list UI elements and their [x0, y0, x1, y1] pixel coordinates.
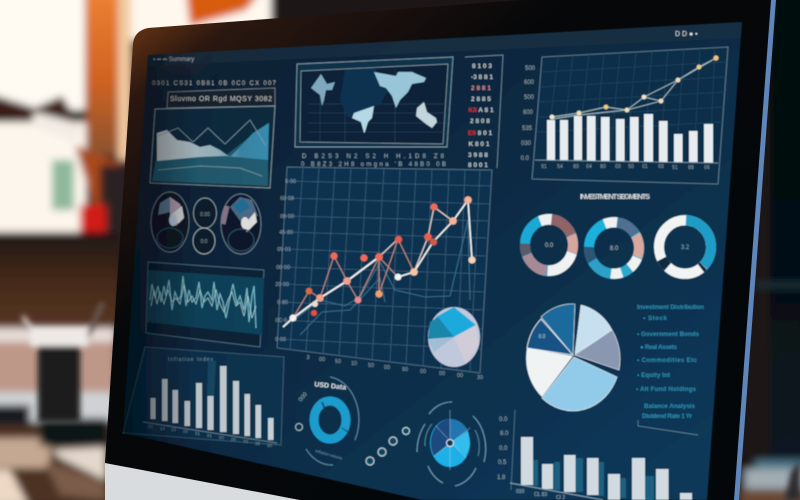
side markers: 000: [298, 391, 309, 403]
x labels: 38: [255, 441, 261, 446]
y axis labels: 20 00: [275, 282, 289, 288]
y labels column beside right gauge: 1.8: [497, 475, 506, 481]
bars: [547, 114, 713, 163]
grid: [537, 47, 727, 160]
big pie chart: [526, 304, 620, 411]
y axis labels: 0C 0: [275, 318, 287, 324]
gauge three: [221, 194, 261, 254]
salmon series: [293, 239, 414, 318]
panel: legend list: Dividend Rate 1 Yr: [642, 413, 693, 420]
area chart title: Sluvmo OR Rgd MQSY 3082: [170, 96, 272, 103]
y labels: 600: [523, 110, 534, 116]
panel: waveform: [146, 262, 264, 347]
land: dark continent: [340, 68, 388, 118]
panel: area chart: [150, 88, 275, 188]
x axis labels: [306, 355, 483, 381]
panel: legend list: Investment Distribution: [637, 304, 704, 311]
chart heading: Inflation Index: [168, 357, 214, 363]
y axis labels: 00 00: [276, 265, 290, 271]
x axis labels: 00: [457, 373, 463, 379]
x labels: 91: [195, 431, 201, 436]
x labels: 60: [219, 435, 225, 440]
x axis labels: 00: [384, 365, 390, 371]
panel: legend list: ▪ Equity Int: [637, 372, 670, 379]
panel: main line chart: [275, 167, 492, 381]
table values: 3 9 8 8: [468, 152, 488, 159]
donut three label: 3.2: [681, 244, 690, 251]
y axis labels: 05 01: [277, 247, 291, 253]
y axis labels: 00 00: [280, 214, 294, 220]
map caption: D B2S3 N2 S2 H H,1D8 Z8: [302, 154, 445, 160]
gauge two small circles: 0:30: [200, 212, 210, 218]
panel: legend list: ▪ Commodities Etc: [637, 357, 698, 364]
y axis labels: 60 08: [280, 196, 294, 202]
panel: top-right bar and line chart: [521, 47, 728, 184]
x labels: 01: [642, 164, 648, 170]
y axis labels: 45 80: [279, 230, 293, 236]
x labels: 91: [541, 164, 547, 170]
gauge two small circles: 0:0: [201, 239, 208, 245]
x axis labels: 30: [477, 375, 483, 381]
baseline: [143, 422, 277, 443]
pie slice: light blue: [542, 357, 617, 411]
screen: [123, 22, 742, 500]
waveform series: [150, 276, 256, 328]
faint teal series: [291, 220, 470, 335]
x labels: 030: [516, 489, 525, 495]
x axis labels: 00: [319, 357, 325, 363]
hub: [446, 440, 454, 446]
bars: [150, 366, 274, 440]
land: eurasia: [374, 72, 426, 108]
y labels: 600: [524, 80, 535, 86]
land: north america: [311, 74, 335, 106]
y labels column beside right gauge: 0.0: [499, 446, 508, 452]
caption: Inflation volume: [315, 448, 344, 461]
y axis labels: 0 00: [275, 337, 286, 343]
donut two: [579, 212, 649, 284]
white bars: [521, 437, 692, 500]
panel: world map: 0 B8Z3 2H8 omgna 'B 48B0 0B: [301, 162, 446, 168]
x labels: 04: [586, 164, 592, 170]
outer arc: [306, 377, 359, 465]
panel: world map: [295, 57, 453, 168]
pen on desk: [785, 462, 800, 500]
y labels column beside right gauge: 8.0: [500, 431, 509, 437]
y labels column beside right gauge: [497, 417, 509, 481]
table values: K 8 0 1: [469, 141, 490, 148]
table values: 8 1 0 3: [472, 63, 492, 70]
outer arcs: [417, 402, 486, 486]
x labels: 23: [171, 427, 177, 432]
gauge heading: USD Data: [314, 381, 346, 392]
y labels: [521, 66, 536, 162]
gauge: left ring donut: [296, 377, 359, 465]
x labels: 50: [628, 164, 634, 170]
x labels: 00: [615, 164, 621, 170]
left-side screen shading: [123, 22, 742, 500]
y axis labels: 6 00: [285, 179, 296, 185]
x axis labels: 50: [335, 359, 341, 365]
y labels: 500: [524, 95, 535, 101]
panel: bottom-right bar chart: [510, 410, 692, 500]
x labels: 00: [231, 437, 237, 442]
window controls: D D ● ▪: [675, 31, 698, 38]
pie slice: dark blue: [527, 319, 573, 355]
land: australia: [416, 102, 437, 128]
gauge two small circles: [193, 198, 216, 254]
screen top bar: [148, 22, 742, 66]
pie slice: white: [526, 348, 573, 397]
y axis labels: 0 80: [277, 300, 288, 306]
grid lines: [278, 168, 491, 372]
panel: legend list: ▪ Government Bonds: [637, 331, 700, 338]
teal lower band: [152, 123, 268, 186]
panel: legend list: ● Real Assets: [640, 344, 678, 351]
gauge: right radial pie: [417, 402, 486, 486]
x labels: 81: [207, 433, 213, 438]
pie label: 0.0: [539, 334, 546, 340]
x axis labels: 00: [439, 371, 445, 377]
x labels: 88: [688, 165, 694, 171]
pie slice: mid blue: [541, 304, 575, 355]
x labels: 70: [243, 439, 249, 444]
small status icons: [366, 428, 410, 465]
legend entry: ▪ Stock: [643, 315, 668, 322]
x labels: 00: [183, 429, 189, 434]
silver monitor edge: [734, 0, 776, 500]
table values: 8 0 0 1: [468, 162, 488, 169]
panel: bottom-left bar chart: [123, 347, 284, 448]
table values: [468, 63, 494, 169]
y labels column beside right gauge: 0.5: [498, 460, 507, 466]
panel: legend list: [636, 304, 704, 435]
panel: legend list: ▪ Alt Fund Holdings: [636, 386, 697, 393]
teal shadow bars: [532, 458, 654, 500]
x labels: 00: [148, 424, 154, 429]
x labels: [541, 164, 710, 171]
highlight band: [207, 360, 216, 396]
gauge one: [151, 192, 189, 252]
section heading: INVESTMENT SEGMENTS: [580, 192, 650, 201]
table values: E9 8 0 1: [468, 130, 492, 137]
donut one: [518, 212, 580, 278]
white series: [283, 257, 379, 327]
y labels: 535: [522, 126, 533, 132]
panel: number table: [465, 55, 503, 169]
ring: [314, 401, 346, 439]
y labels column beside right gauge: 0.0: [499, 417, 508, 423]
grey to blue area series: [157, 123, 269, 161]
table values: -3 8 8 1: [471, 74, 493, 81]
x axis labels: 10: [351, 361, 357, 367]
baseline: [535, 160, 718, 163]
x labels: 51: [672, 165, 678, 171]
x labels: 30: [267, 443, 273, 448]
x labels: 80: [600, 164, 606, 170]
pie: [430, 419, 470, 467]
x axis labels: 50: [368, 363, 374, 369]
x labels: 80: [573, 164, 579, 170]
x labels: CL 83: [534, 492, 547, 498]
table values: 2 8 8 5: [471, 96, 491, 103]
x labels: 06: [704, 165, 710, 171]
baseline: [510, 483, 603, 500]
x labels: 54: [557, 164, 563, 170]
y labels: 030: [521, 141, 532, 147]
donut two label: 8.0: [610, 245, 619, 252]
panel: legend list: Balance Analysis: [644, 403, 696, 410]
pie slice: grey: [575, 330, 620, 370]
pen cup with pens: [24, 304, 102, 422]
tab labels row: 0301 CS31 0B81 0B 0C0 CX 007: [152, 81, 277, 87]
monitor stand chin: [105, 462, 300, 500]
pie slice: pale blue: [575, 305, 612, 354]
donut three: [648, 209, 722, 285]
x axis labels: 00: [420, 369, 426, 375]
x labels: 00: [658, 164, 664, 170]
line points: [550, 55, 719, 119]
outline lines: [158, 120, 266, 176]
panel: gauge dials: [151, 192, 261, 254]
y axis labels: [275, 179, 296, 343]
land: africa: [352, 106, 374, 133]
x axis labels: 90: [402, 367, 408, 373]
y labels: 500: [525, 66, 536, 72]
line series: [552, 58, 716, 119]
donut one label: 0.0: [545, 242, 554, 249]
table values: 2 8 0 8: [470, 118, 490, 125]
table values: 2 8 8 1: [471, 85, 491, 92]
map grid lines: [308, 70, 444, 142]
data points: [290, 196, 476, 322]
small pie: [428, 307, 480, 367]
y labels: 0.0: [521, 156, 530, 162]
top bar title: ▪ ▪▪ ▪▪ Summary: [153, 57, 194, 63]
x axis labels: 3: [306, 355, 310, 361]
x labels: 24: [160, 426, 166, 431]
table values: K8 A 8 1: [468, 107, 494, 114]
